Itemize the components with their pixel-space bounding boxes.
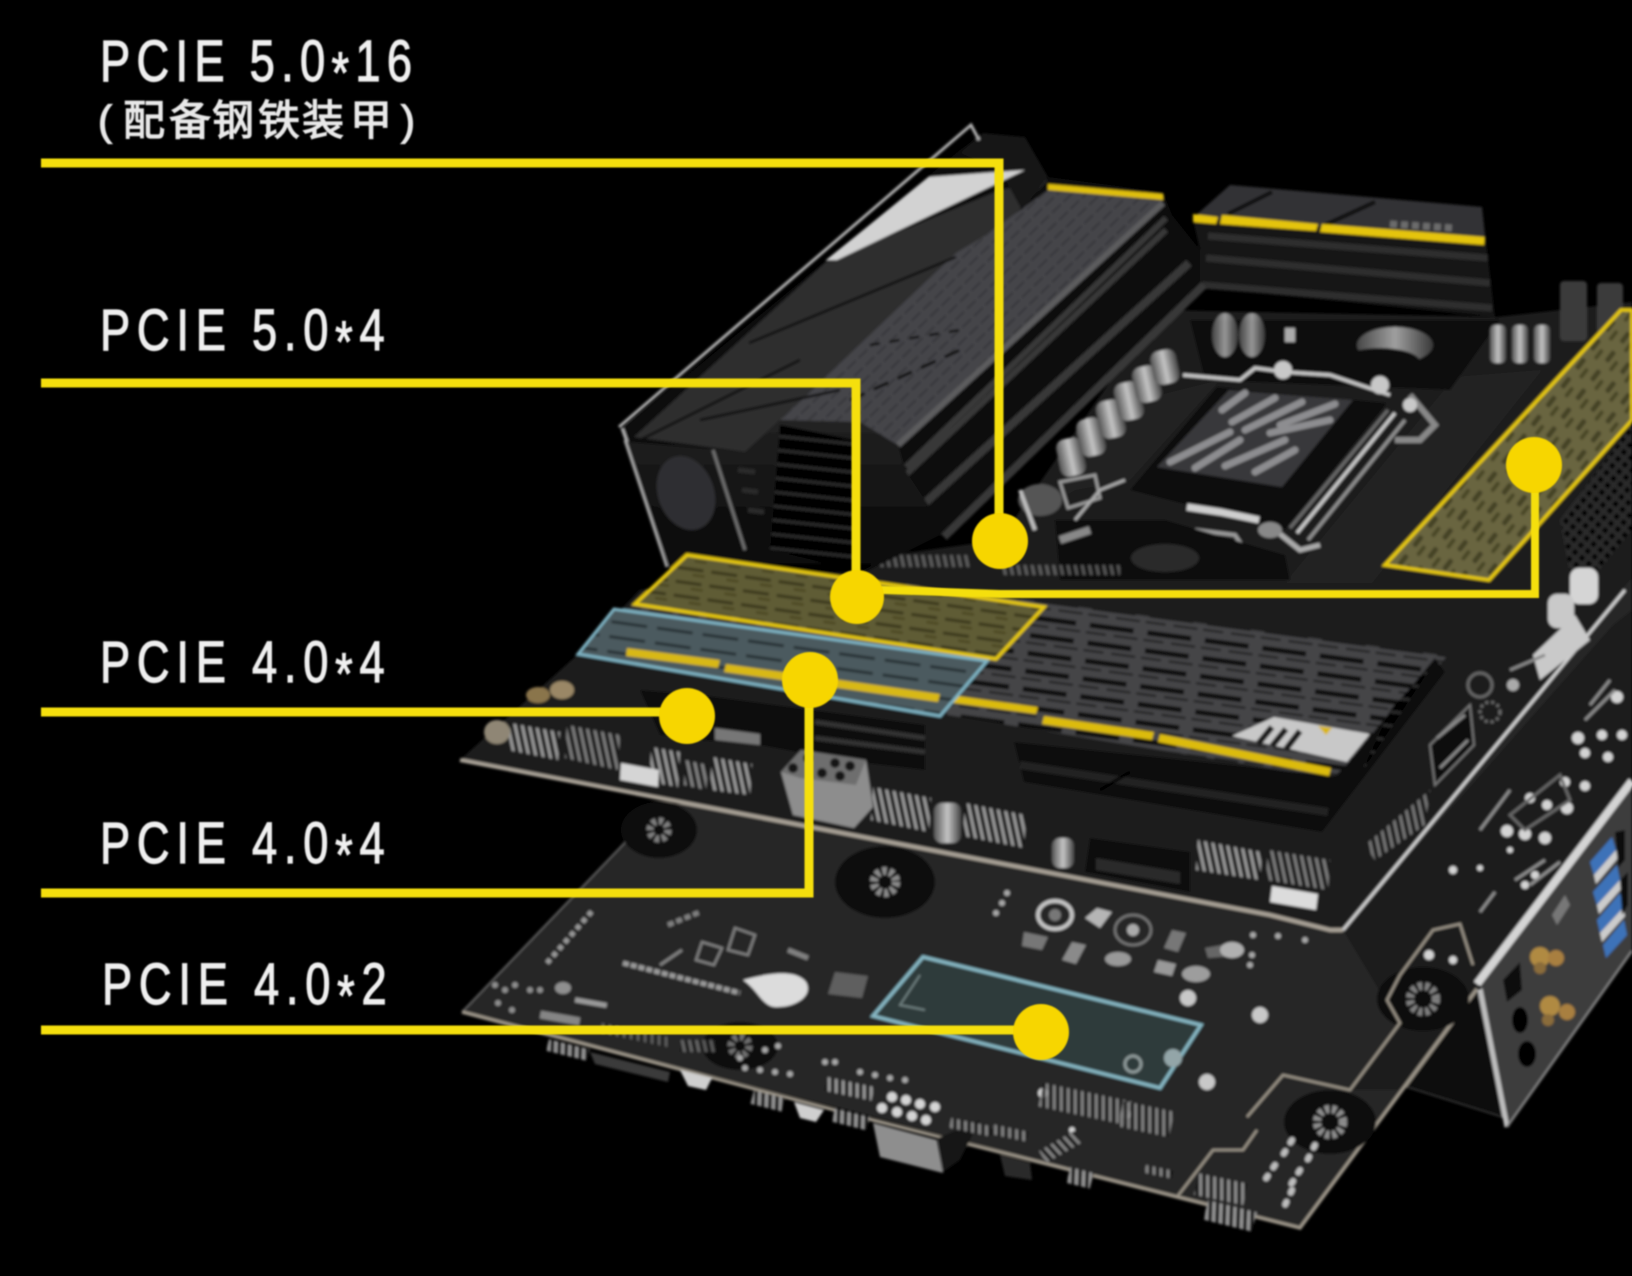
callout: PCIE 5.0*16: * <box>331 42 349 106</box>
callout: PCIE 4.0*2 <box>41 953 1069 1060</box>
8-pin power connector <box>781 750 873 828</box>
callouts <box>41 30 1562 1060</box>
callout: PCIE 4.0*4 lower: PCIE 4.0 <box>100 812 328 876</box>
bright area upper right <box>1468 615 1590 722</box>
callout: PCIE 5.0*16: (配备钢铁装甲) <box>98 97 415 144</box>
dark slot block <box>640 690 700 740</box>
illustration: exploded motherboard <box>460 125 1632 1232</box>
M.2 heatsink <box>578 555 1447 832</box>
dark under-socket block <box>1055 520 1290 580</box>
surface edge <box>898 203 1163 445</box>
stacked SATA ports <box>1365 705 1474 860</box>
M.2 screw and standoff <box>1125 1056 1141 1072</box>
callout: PCIE 5.0*16: PCIE 5.0 <box>100 30 325 94</box>
blue M.2 panel <box>578 609 987 716</box>
white capacitors <box>1548 568 1598 628</box>
callout: PCIE 5.0*16 <box>41 30 1028 569</box>
callout: PCIE 5.0*4 <box>41 299 1562 624</box>
rear heatsink <box>1193 185 1495 317</box>
callout: PCIE 4.0*2: 2 <box>362 953 387 1017</box>
heatsink ridges <box>898 218 1204 537</box>
raised trace outline <box>1177 924 1473 1197</box>
VRM capacitor row <box>1054 348 1181 478</box>
pad patch <box>1480 680 1615 912</box>
upper board layer <box>460 302 1632 930</box>
rear heatsink yellow stripe <box>1193 214 1485 245</box>
lower board header pads <box>949 1083 1248 1205</box>
main VRM heatsink <box>619 125 1204 575</box>
right-side connectors <box>1548 425 1632 628</box>
M.2 shield panel: lower <box>873 957 1201 1088</box>
callout: PCIE 4.0*4 lower <box>41 652 838 893</box>
HDMI port <box>1552 895 1570 925</box>
lower PCB <box>462 560 1632 1228</box>
silver top edge <box>1477 781 1632 984</box>
callout: PCIE 4.0*4 lower: 4 <box>360 812 385 876</box>
face grooves <box>640 257 960 440</box>
lower-left pad cluster <box>600 1023 908 1101</box>
CMOS battery <box>743 973 808 1007</box>
CPU socket frame <box>1130 387 1387 530</box>
audio jacks <box>1503 947 1575 1067</box>
yellow stripe <box>626 648 1331 776</box>
rear dark plate behind IO shield <box>1400 990 1505 1118</box>
heatsink front <box>625 420 945 572</box>
lower right pads <box>1265 1140 1315 1205</box>
rear pins <box>1560 281 1623 341</box>
callout: PCIE 4.0*4 upper <box>41 631 715 744</box>
top VRM <box>1190 313 1550 390</box>
stripe over blue panel <box>626 648 940 702</box>
front acrylic lines <box>625 440 667 567</box>
olive panel: right <box>1385 310 1632 580</box>
24-pin connector <box>1560 425 1632 600</box>
callout: PCIE 4.0*2: * <box>337 965 355 1029</box>
heatsink top stripe <box>1048 184 1163 200</box>
black cap <box>960 133 1048 210</box>
silkscreen diagrams <box>547 910 808 965</box>
callout: PCIE 5.0*4: * <box>335 311 353 375</box>
IO shield <box>1477 781 1632 1127</box>
front block <box>1014 658 1445 832</box>
rear pins under board <box>546 1039 1257 1232</box>
callout: PCIE 5.0*16: 16 <box>355 30 412 94</box>
socket knobs <box>1244 361 1417 567</box>
bright dots between upper edge and IO shield <box>1424 691 1627 964</box>
chrome cluster near heatsink <box>1018 475 1125 540</box>
callout: PCIE 4.0*4 lower: * <box>335 824 353 888</box>
upper PCB <box>460 302 1632 930</box>
callout: PCIE 4.0*2: PCIE 4.0 <box>102 953 330 1017</box>
VRM and CPU socket area <box>745 281 1623 583</box>
patterned top surface <box>780 190 1163 445</box>
callout: PCIE 5.0*4: 4 <box>360 299 385 363</box>
left board edge <box>462 805 661 1012</box>
bottom slot connector <box>1085 838 1190 892</box>
white connectors <box>620 763 659 787</box>
PCIe slots <box>700 695 925 770</box>
heatsink body <box>621 133 1200 575</box>
olive M.2 panel <box>635 555 1044 659</box>
callout: PCIE 4.0*4 upper: 4 <box>360 631 385 695</box>
board bits under heatsink <box>745 518 1120 575</box>
mounting holes <box>621 802 1469 1154</box>
M.2 connector detail <box>900 975 925 1010</box>
rear heatsink logo <box>1390 224 1452 228</box>
USB ports <box>1590 830 1628 958</box>
top face <box>578 555 1447 778</box>
acrylic edge line <box>619 125 979 427</box>
callout: PCIE 4.0*4 upper: * <box>335 643 353 707</box>
white wedge <box>826 170 1025 260</box>
board front edge <box>462 989 1477 1228</box>
upper PCB edge highlight <box>460 760 1343 930</box>
left silkscreen cluster <box>492 982 607 1025</box>
flat PCB left of socket <box>1040 380 1220 510</box>
capacitors <box>484 681 1074 868</box>
silver left edge <box>1480 989 1507 1127</box>
bottom connector <box>873 1123 943 1173</box>
small chip <box>828 972 868 998</box>
silver plate <box>1232 717 1370 762</box>
callout: PCIE 5.0*4: PCIE 5.0 <box>100 299 328 363</box>
pin headers <box>508 723 1330 890</box>
fan disc <box>647 448 725 538</box>
bright solder dots <box>877 1088 1131 1133</box>
CPU IHS with logo <box>1157 390 1353 487</box>
M.2 slot silkscreen <box>623 963 740 993</box>
flat PCB right of socket <box>1285 370 1542 583</box>
lower board layer <box>462 560 1632 1232</box>
sloped upper face <box>634 180 1048 452</box>
callout: PCIE 4.0*4 upper: PCIE 4.0 <box>100 631 328 695</box>
socket chrome <box>1183 368 1435 550</box>
right dark section of lower PCB <box>1343 610 1632 1090</box>
silkscreen logos <box>993 890 1308 1090</box>
fin notches <box>738 470 764 512</box>
